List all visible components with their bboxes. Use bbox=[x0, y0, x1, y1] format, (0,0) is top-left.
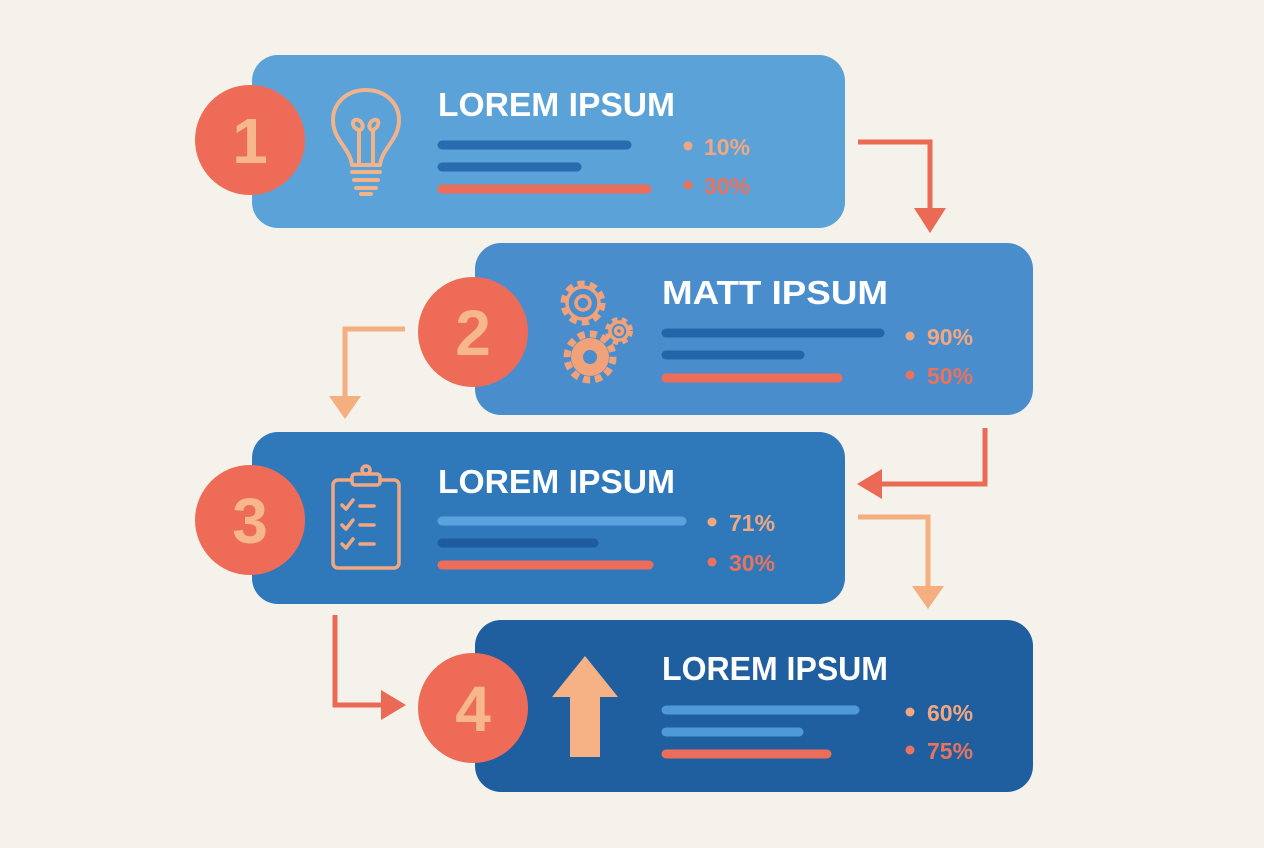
title 3: LOREM IPSUM bbox=[438, 463, 675, 500]
percentages 4 bbox=[906, 700, 973, 764]
percentages 1 bbox=[684, 134, 750, 199]
bars 3 bbox=[442, 521, 682, 565]
panel 2 bbox=[475, 243, 1033, 415]
badge 4: 4 bbox=[455, 673, 491, 745]
percentages 2: 90% bbox=[927, 324, 973, 350]
bars 1 bbox=[442, 145, 647, 189]
badge 2 bbox=[418, 277, 528, 387]
arrow 2 to 3 bbox=[329, 329, 405, 419]
badge 4 bbox=[418, 653, 528, 763]
badge 1: 1 bbox=[232, 105, 268, 177]
arrow 3 to 4 right side bbox=[858, 517, 944, 609]
panel 1 bbox=[252, 55, 845, 228]
icon: clipboard bbox=[333, 466, 399, 568]
percentages 2 bbox=[906, 324, 973, 389]
percentages 3: 71% bbox=[729, 510, 775, 536]
title 1: LOREM IPSUM bbox=[438, 86, 675, 123]
percentages 1: 10% bbox=[704, 134, 750, 160]
bars 4 bbox=[666, 710, 855, 754]
arrow from 2 to 3 right side bbox=[857, 428, 985, 499]
percentages 1: 30% bbox=[704, 173, 750, 199]
bars 2 bbox=[666, 333, 880, 378]
badge 1 bbox=[195, 85, 305, 195]
badge 2: 2 bbox=[455, 297, 491, 369]
panel 4 bbox=[475, 620, 1033, 792]
icon: light bulb bbox=[333, 90, 399, 194]
title 4: LOREM IPSUM bbox=[662, 650, 888, 687]
percentages 4: 60% bbox=[927, 700, 973, 726]
title 2: MATT IPSUM bbox=[662, 274, 888, 311]
badge 3 bbox=[195, 465, 305, 575]
percentages 3 bbox=[708, 510, 775, 576]
arrow 1 to 2 bbox=[858, 142, 946, 233]
percentages 4: 75% bbox=[927, 738, 973, 764]
icon: gears bbox=[564, 284, 630, 380]
percentages 2: 50% bbox=[927, 363, 973, 389]
panel 3 bbox=[252, 432, 845, 604]
badge 3: 3 bbox=[232, 485, 268, 557]
arrow 3 to 4 left side bbox=[335, 615, 406, 720]
percentages 3: 30% bbox=[729, 550, 775, 576]
icon: up arrow bbox=[552, 656, 618, 757]
